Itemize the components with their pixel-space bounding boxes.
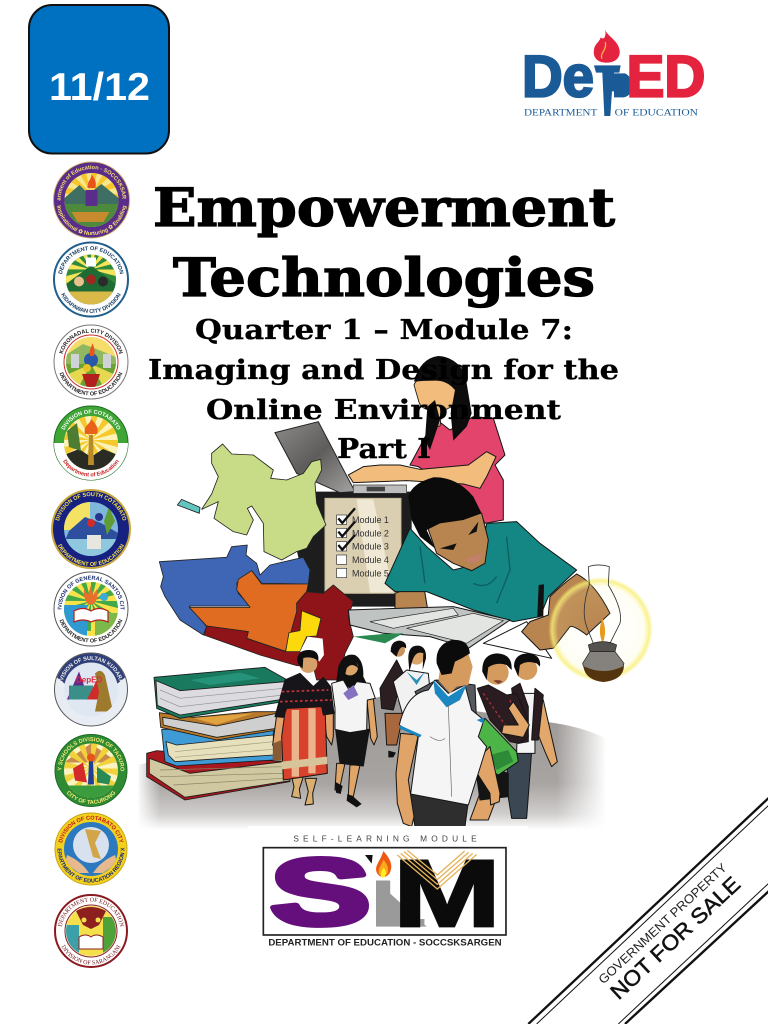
- subtitle: [148, 315, 619, 465]
- DepED logo: ED: [627, 45, 705, 110]
- seal: Division of South Cotabato: [51, 489, 131, 569]
- SLM logo: M: [393, 841, 501, 947]
- seal: SOCCSKSARGEN region: [53, 162, 130, 238]
- seal: Koronadal City Division: DEPARTMENT OF EDUCATION: [60, 372, 122, 396]
- DepED logo: De: [522, 45, 594, 110]
- map region: dark red: [204, 585, 353, 680]
- SLM logo: [263, 834, 506, 948]
- seal: Koronadal City Division: [54, 324, 128, 400]
- book: red cover: [147, 751, 290, 800]
- map region: blue: [159, 545, 310, 635]
- subtitle: Online Environment: [206, 395, 562, 426]
- SLM logo: DEPARTMENT OF EDUCATION - SOCCSKSARGEN: [268, 938, 502, 948]
- module checklist monitor and laptop: Module 4: [352, 555, 389, 565]
- seal: Sarangani: [54, 894, 128, 968]
- not for sale ribbon: [528, 797, 768, 1024]
- seal: Kidapawan City Division: DEPARTMENT OF EDUCATION: [58, 246, 124, 274]
- woman in traditional dress: [273, 650, 334, 805]
- title: Empowerment: [153, 178, 615, 239]
- book: orange cover: [159, 712, 277, 740]
- seal: General Santos City: DEPARTMENT OF EDUCATION: [60, 619, 122, 642]
- seal: Tacurong City: [54, 734, 128, 807]
- column of division seals: [51, 162, 131, 968]
- grade level badge: [29, 5, 169, 154]
- seal: Tacurong City: CITY OF TACURONG: [67, 791, 116, 804]
- subtitle: Part I: [337, 434, 431, 465]
- seal: Division of South Cotabato: DEPARTMENT OF EDUCATION: [58, 544, 124, 566]
- module checklist monitor and laptop: Module 5: [352, 568, 389, 578]
- seal: Cotabato City: DIVISION OF COTABATO CITY: [58, 816, 124, 843]
- back teachers: [380, 641, 430, 757]
- book: green cover: [154, 667, 287, 718]
- seal: Kidapawan City Division: [53, 242, 129, 318]
- grade level badge: 11/12: [49, 66, 150, 109]
- oil lamp with glow: [548, 565, 653, 682]
- seal: Division of Cotabato: DIVISION OF COTABATO: [61, 410, 120, 430]
- SLM logo: L: [371, 868, 427, 942]
- DepED logo: DEPARTMENT: [524, 108, 598, 118]
- stack of books: [147, 667, 290, 800]
- seal: Sultan Kudarat: DepED: [76, 676, 102, 684]
- boy in white uniform with backpack: [396, 640, 500, 827]
- regional map: [159, 444, 353, 680]
- map region: yellow: [286, 611, 321, 652]
- seal: General Santos City: DIVISION OF GENERAL SANTOS CITY: [58, 576, 124, 610]
- module checklist monitor and laptop: Module 1: [352, 515, 389, 525]
- SLM logo: SELF-LEARNING MODULE: [293, 834, 477, 844]
- seal: SOCCSKSARGEN region: Inspirational ✿ Nurturing ✿ Enabling: [57, 205, 127, 235]
- seal: Division of Cotabato: Department of Education: [63, 459, 119, 476]
- module checklist monitor and laptop: [275, 422, 412, 607]
- student writing by lamplight: [385, 477, 610, 658]
- woman in school uniform: [332, 655, 377, 807]
- module checklist monitor and laptop: Module 3: [352, 542, 389, 552]
- SLM logo: S: [270, 839, 371, 944]
- book: blue cover: [162, 728, 273, 766]
- seal: Sarangani: DIVISION OF SARANGANI: [61, 944, 121, 964]
- subtitle: Imaging and Design for the: [148, 355, 619, 386]
- map region: orange: [189, 571, 308, 652]
- boy with green bag: [470, 653, 529, 820]
- open textbook: [348, 607, 510, 648]
- module checklist monitor and laptop: Module 2: [352, 528, 389, 538]
- seal: Cotabato City: [54, 812, 128, 886]
- white band under illustration: [248, 826, 528, 830]
- seal: Sultan Kudarat: [54, 652, 128, 726]
- seal: Koronadal City Division: KORONADAL CITY DIVISION: [59, 328, 123, 354]
- seal: SOCCSKSARGEN region: Department of Education - SOCCSKSARGEN: [57, 164, 126, 200]
- seal: Division of South Cotabato: DIVISION OF SOUTH COTABATO: [55, 492, 126, 521]
- seal: Kidapawan City Division: KIDAPAWAN CITY DIVISION: [61, 292, 121, 313]
- DepED logo: [522, 29, 705, 118]
- map region: cyan islet: [177, 499, 200, 513]
- not for sale ribbon: NOT FOR SALE: [606, 872, 745, 1004]
- seal: General Santos City: [54, 572, 128, 646]
- not for sale ribbon: GOVERNMENT PROPERTY: [596, 860, 730, 987]
- DepED logo: OF EDUCATION: [615, 108, 698, 118]
- students and teachers walking: [273, 640, 557, 827]
- boy with vest and jeans: [507, 653, 557, 818]
- title: [153, 178, 615, 309]
- cover illustration: [137, 356, 653, 833]
- seal: Sultan Kudarat: DIVISION OF SULTAN KUDARAT: [59, 656, 122, 682]
- seal: Cotabato City: DEPARTMENT OF EDUCATION REGION XII: [58, 848, 125, 882]
- map region: green: [202, 444, 326, 560]
- seal: Division of Cotabato: [54, 406, 128, 480]
- subtitle: Quarter 1 – Module 7:: [195, 315, 573, 346]
- seal: Tacurong City: CITY SCHOOLS DIVISION OF TACURONG: [58, 737, 124, 771]
- girl using laptop: [348, 356, 505, 523]
- title: Technologies: [173, 248, 595, 309]
- seal: Sarangani: DEPARTMENT OF EDUCATION: [58, 898, 124, 927]
- ground shadow: [137, 697, 607, 833]
